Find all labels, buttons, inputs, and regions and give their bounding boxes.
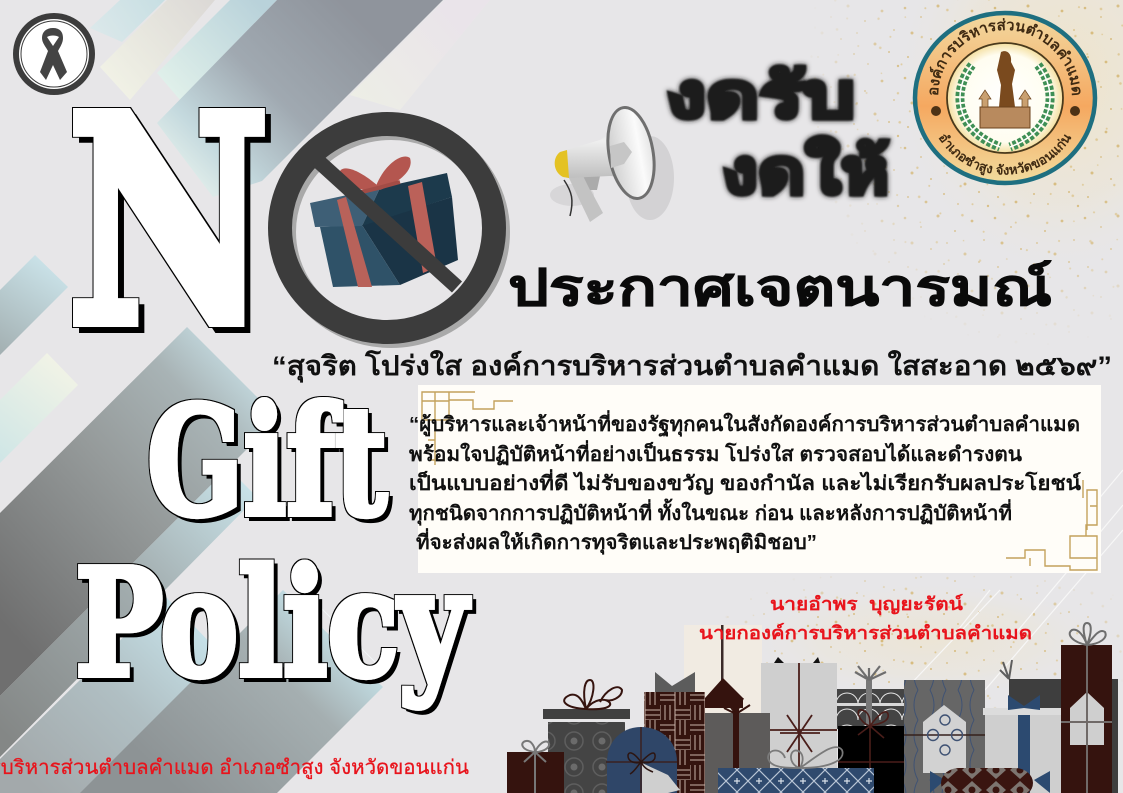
text: signatory title: นายกองค์การบริหารส่วนตำบลคำแมด [699,622,1032,643]
illustration: gift boxes [507,623,1118,793]
gift: blue patterned box [718,747,874,793]
panel: pledge statement [409,385,1101,573]
gift: small brown box [507,741,564,793]
heading: งดรับ: งดรับ [666,63,855,131]
heading: Gift: Gift [147,374,387,550]
logo: subdistrict seal [912,10,1098,186]
logo: subdistrict seal: องค์การบริหารส่วนตำบลคำแมด [930,18,1080,96]
gift: wavy grey box with tag [904,680,985,793]
icon: mourning ribbon badge [13,13,95,95]
heading: declaration title: ประกาศเจตนารมณ์ [508,260,1052,316]
gift: light box with blue ribbon [983,695,1064,793]
gift: candy box [930,768,1050,793]
text: pledge line 3: เป็นแบบอย่างที่ดี ไม่รับของขวัญ ของกำนัล และไม่เรียกรับผลประโยชน์ [409,468,1081,495]
gift: dark lid box [1000,660,1118,793]
text: pledge line 5: ที่จะส่งผลให้เกิดการทุจริตและประพฤติมิชอบ” [416,527,817,555]
ornament: bottom-right gold corner [1006,480,1097,570]
icon: gift box [310,157,458,287]
gift: tall brown box [1061,623,1112,793]
ornament: top-left gold corner [422,392,513,465]
gift: light grey box [761,657,837,770]
gift: brown tag box [684,678,762,713]
heading: N: N [68,54,269,388]
gift: round blue box [606,727,680,793]
gift: black box [838,710,913,793]
heading: งดให้: งดให้ [722,136,889,207]
subheading: integrity slogan: “สุจริต โปร่งใส องค์การบริหารส่วนตำบลคำแมด ใสสะอาด ๒๕๖๙” [272,349,1112,383]
background: gold speckle [700,0,1123,720]
text: signatory name: นายอำพร บุญยะรัตน์ [770,593,964,616]
gift: cream box [684,625,762,710]
text: pledge line 4: ทุกชนิดจากการปฏิบัติหน้าที่ ทั้งในขณะ ก่อน และหลังการปฏิบัติหน้าที่ [409,498,1012,526]
text: pledge line 2: พร้อมใจปฏิบัติหน้าที่อย่างเป็นธรรม โปร่งใส ตรวจสอบได้และดำรงตน [409,439,1022,466]
gift: brown brick box [644,672,705,793]
background: diagonal stripes [0,0,490,793]
gift: dark grey box [705,698,770,793]
gift: scale pattern box [837,666,904,729]
logo: subdistrict seal: อำเภอซำสูง จังหวัดขอนแก่น [938,134,1072,176]
gift: grey patterned box [543,680,630,793]
text: pledge line 1: “ผู้บริหารและเจ้าหน้าที่ของรัฐทุกคนในสังกัดองค์การบริหารส่วนตำบลคำแมด [409,409,1080,438]
icon: prohibited gift [280,124,498,336]
icon: megaphone [550,104,674,222]
heading: Policy: Policy [75,536,470,710]
